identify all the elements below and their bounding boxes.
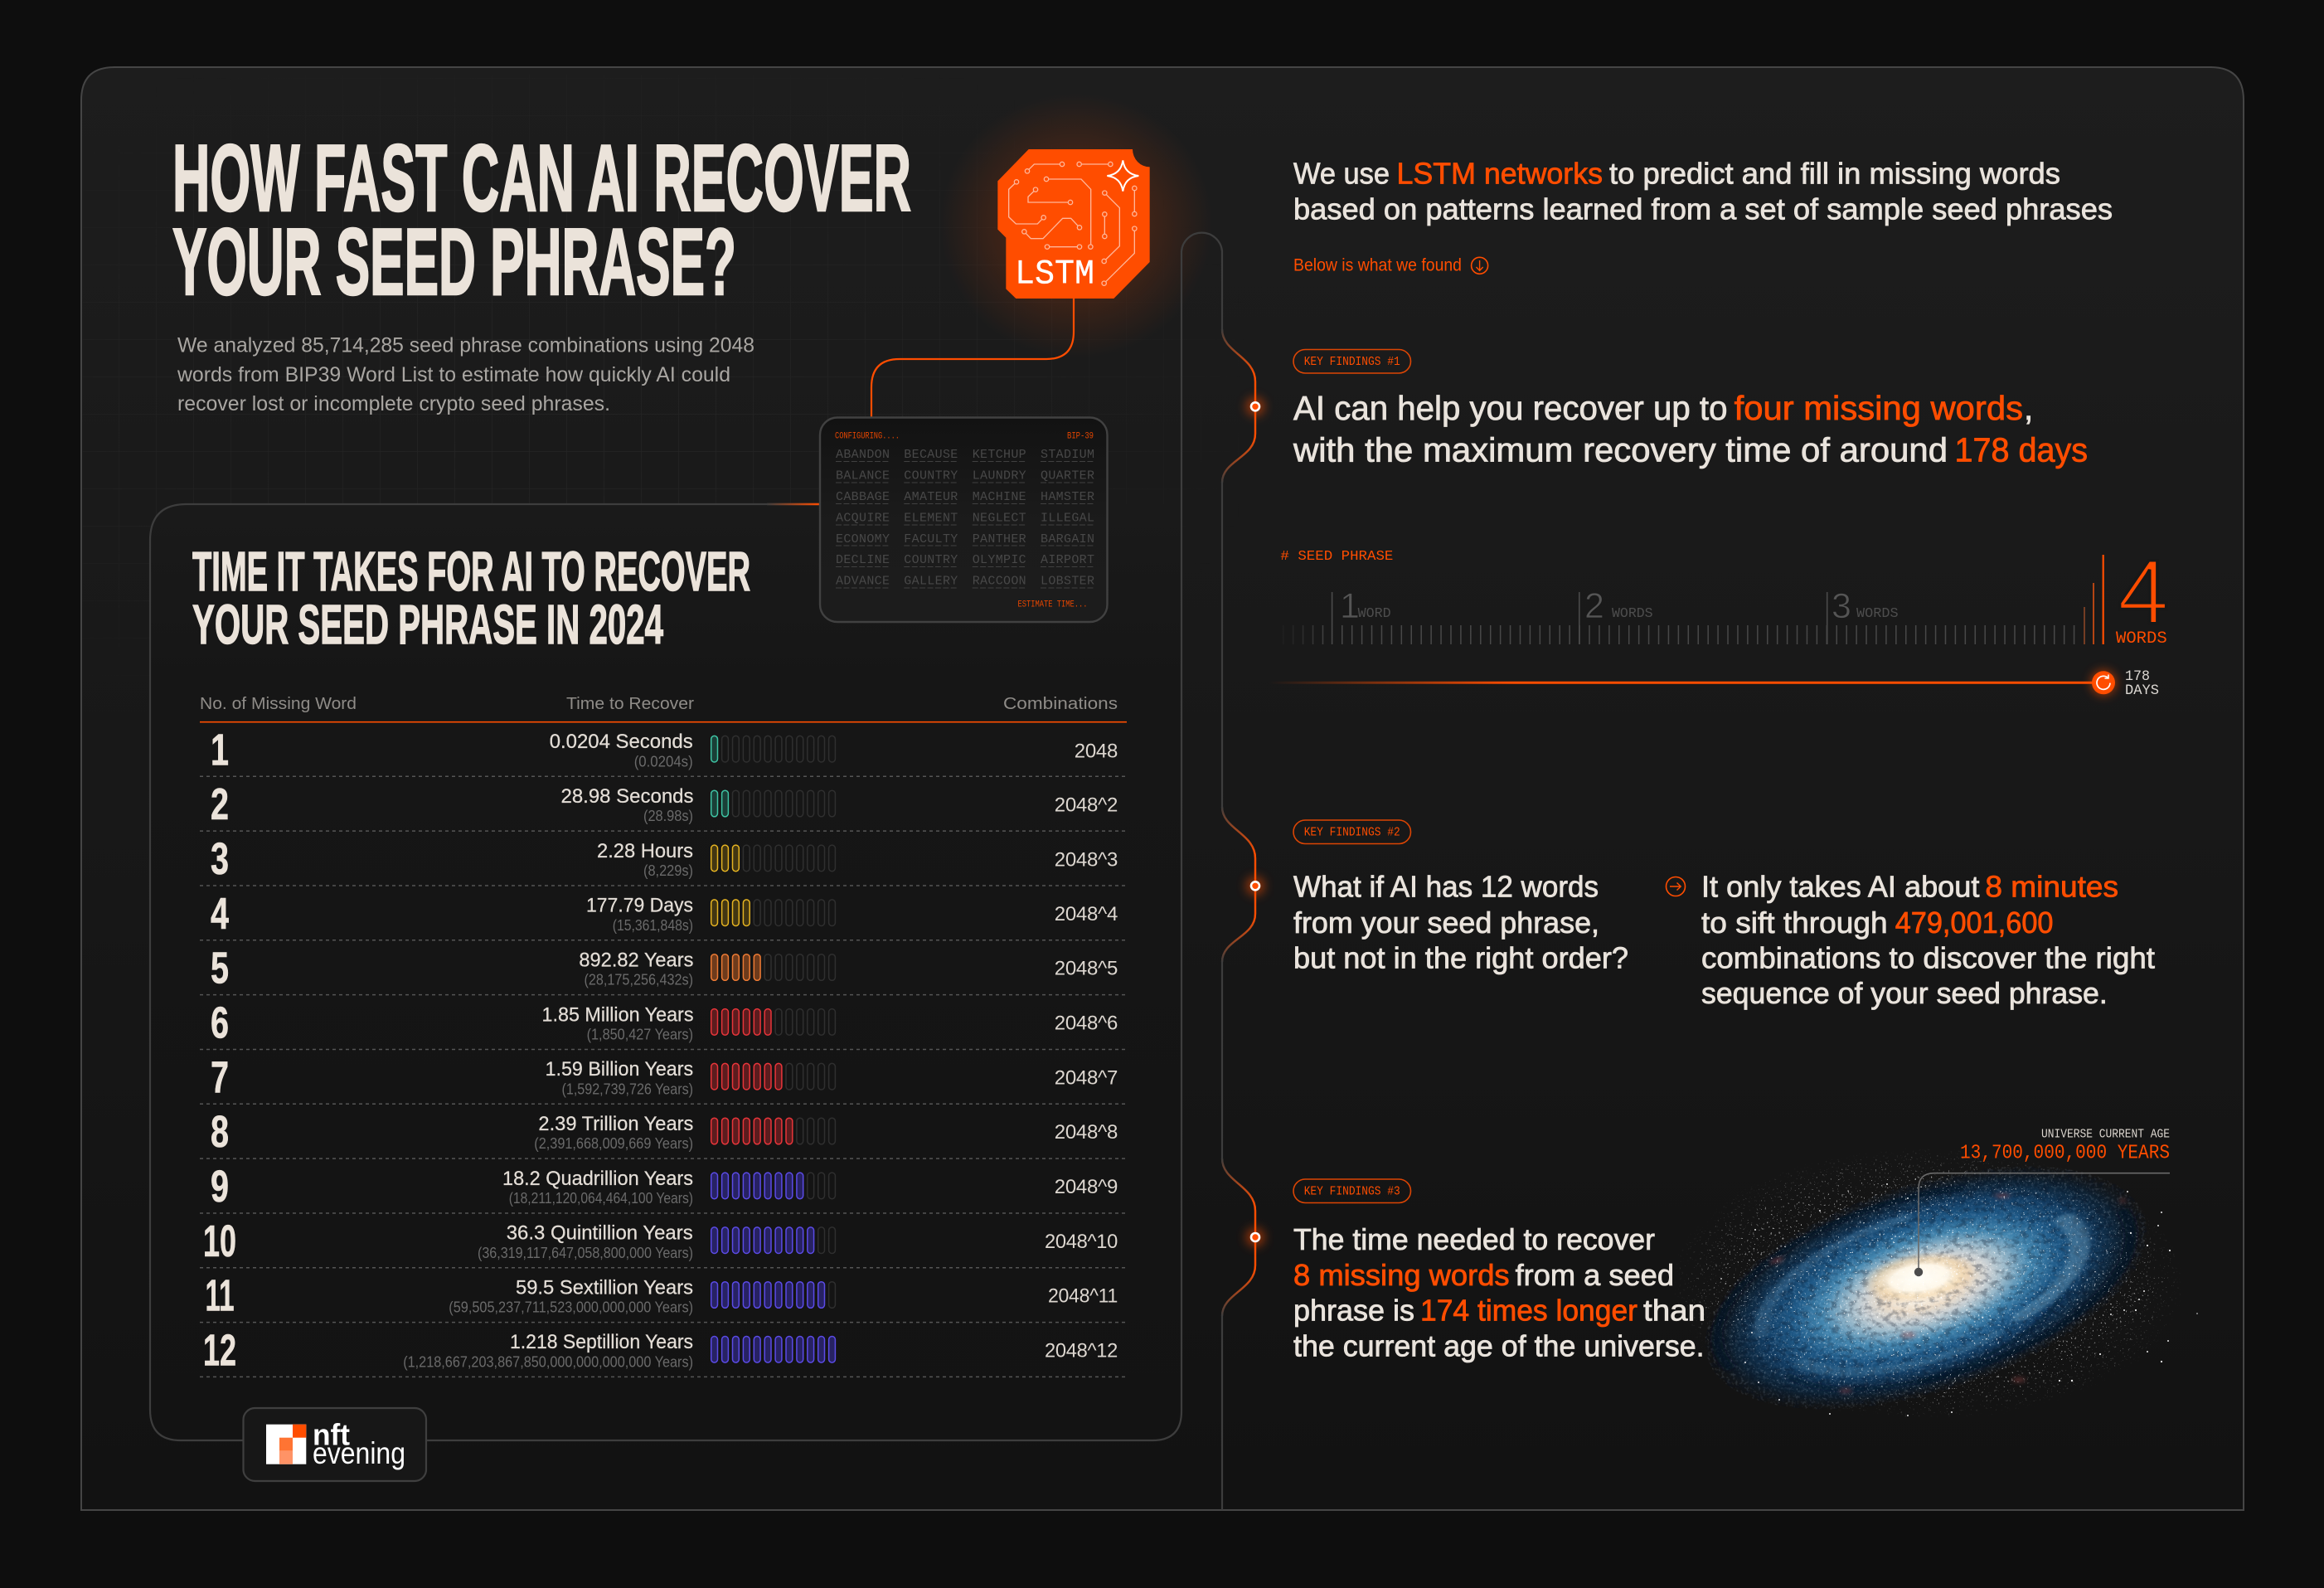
finding 2 answer: 8 minutes [1985, 869, 2118, 904]
title: HOW FAST CAN AI RECOVER [172, 126, 911, 231]
logo: nft evening [244, 1408, 426, 1481]
table row 12: (1,218,667,203,867,850,000,000,000,000 Years) [403, 1353, 693, 1370]
panel: BIP-39 terminal [820, 418, 1108, 622]
word list: NEGLECT [973, 511, 1026, 526]
ruler label: # SEED PHRASE [1280, 549, 1393, 565]
word list: BALANCE [836, 469, 890, 483]
table row 1: (0.0204s) [634, 753, 693, 770]
word list: HAMSTER [1041, 490, 1094, 504]
finding 3 text: from a seed [1516, 1258, 1674, 1292]
word list: MACHINE [973, 490, 1026, 504]
recovery time line [1269, 682, 2094, 684]
badge: key findings 2 [1293, 820, 1411, 844]
finding 3 text: 8 missing words [1293, 1258, 1510, 1292]
ruler tick labels [1340, 586, 1899, 626]
connector highlight: finding 2 [1222, 807, 1264, 962]
finding 2 answer: combinations to discover the right [1701, 940, 2155, 975]
table row 2 [200, 779, 1127, 831]
table row 10: 36.3 Quintillion Years [507, 1222, 693, 1245]
178 days label: DAYS [2125, 682, 2159, 699]
table row 6: 6 [211, 998, 229, 1048]
table row 10: 10 [203, 1216, 236, 1266]
table row 9 [200, 1162, 1127, 1213]
table row 7: (1,592,739,726 Years) [562, 1081, 693, 1097]
table row 3: (8,229s) [643, 862, 693, 879]
table row 7: 2048^7 [1055, 1066, 1118, 1089]
table row 2: 28.98 Seconds [560, 785, 693, 808]
finding 2 question: from your seed phrase, [1293, 906, 1599, 940]
finding 1 text [1293, 389, 2088, 469]
finding 1 text: 178 days [1955, 431, 2088, 469]
title: YOUR SEED PHRASE? [172, 210, 736, 315]
finding 1 text: with the maximum recovery time of around [1293, 431, 1948, 469]
finding 3 text: the current age of the universe. [1293, 1328, 1705, 1363]
finding 2 question: but not in the right order? [1293, 940, 1628, 975]
table row 10: 2048^10 [1045, 1231, 1118, 1253]
table row 8 [200, 1107, 1127, 1158]
below is what we found: Below is what we found [1293, 256, 1462, 275]
finding 2 answer [1701, 869, 2155, 1010]
table row 11: (59,505,237,711,523,000,000,000 Years) [449, 1299, 693, 1316]
badge: key findings 2: KEY FINDINGS #2 [1304, 826, 1400, 839]
icon: LSTM chip [997, 149, 1150, 299]
word list: PANTHER [973, 532, 1026, 546]
table row 11: 2048^11 [1048, 1285, 1118, 1308]
galaxy nebula patches [1769, 1194, 2126, 1393]
icon: timer dot [2091, 670, 2116, 695]
word list: ELEMENT [904, 511, 958, 526]
intro paragraph: words from BIP39 Word List to estimate how quickly AI could [177, 363, 730, 386]
seed phrase ruler [1269, 541, 2169, 699]
logo wordmark: nft [313, 1418, 350, 1452]
logo wordmark: evening [313, 1436, 405, 1470]
table header [200, 694, 1127, 722]
word list: ILLEGAL [1041, 511, 1094, 526]
callout: universe current age: UNIVERSE CURRENT AGE [2041, 1128, 2170, 1142]
finding 1 text: AI can help you recover up to [1293, 389, 1728, 427]
icon: LSTM chip: LSTM [1015, 256, 1094, 294]
178 days label [2125, 668, 2159, 699]
finding 2 question [1293, 869, 1628, 975]
finding 2 answer: to sift through [1701, 906, 1888, 940]
terminal status text: ESTIMATE TIME... [1018, 600, 1088, 610]
table row 3 [200, 834, 1127, 886]
connector highlight: finding 1 [1222, 329, 1264, 483]
table row 9: 18.2 Quadrillion Years [502, 1168, 693, 1190]
panel: table panel with connector outline [150, 233, 1255, 1510]
178 days label: 178 [2125, 668, 2150, 685]
word list: OLYMPIC [973, 553, 1026, 567]
word list: KETCHUP [973, 448, 1026, 462]
finding 2 answer: 479,001,600 [1895, 906, 2053, 940]
word list [836, 448, 1094, 589]
table row 6: 1.85 Million Years [542, 1003, 693, 1026]
callout: universe current age [1914, 1128, 2170, 1276]
finding 3 text: than [1643, 1294, 1705, 1327]
ruler tick labels: WORDS [1856, 605, 1899, 621]
table row 8: (2,391,668,009,669 Years) [534, 1135, 693, 1152]
intro statement: to predict and fill in missing words [1609, 157, 2060, 191]
table heading: YOUR SEED PHRASE IN 2024 [192, 594, 663, 656]
badge: key findings 1 [1293, 350, 1411, 373]
table row 1: 0.0204 Seconds [550, 731, 693, 753]
terminal status text: CONFIGURING.... [835, 431, 900, 441]
table row 8: 2048^8 [1055, 1121, 1118, 1144]
table row 3: 2.28 Hours [597, 840, 693, 862]
finding 3 text: The time needed to recover [1293, 1222, 1655, 1256]
intro paragraph: We analyzed 85,714,285 seed phrase combinations using 2048 [177, 333, 754, 357]
table row 12 [200, 1325, 1127, 1377]
table row 9: (18,211,120,064,464,100 Years) [509, 1190, 693, 1207]
word list: BECAUSE [904, 448, 958, 462]
word list: BARGAIN [1041, 532, 1094, 546]
finding 1 text: , [2024, 389, 2033, 427]
table row 2: (28.98s) [643, 808, 693, 824]
intro paragraph [177, 333, 754, 415]
table row 4: (15,361,848s) [613, 917, 693, 934]
word list: QUARTER [1041, 469, 1094, 483]
icon: arrow right [1667, 877, 1685, 896]
table row 4: 4 [211, 889, 229, 939]
table row 4: 177.79 Days [586, 895, 693, 917]
finding 3 text: phrase is [1293, 1294, 1414, 1327]
word list: ADVANCE [836, 574, 890, 589]
table row 10: (36,319,117,647,058,800,000 Years) [478, 1245, 693, 1261]
word list: FACULTY [904, 532, 958, 546]
badge: key findings 1: KEY FINDINGS #1 [1304, 356, 1400, 369]
terminal status text [835, 431, 1094, 610]
word list: LOBSTER [1041, 574, 1094, 589]
word list: LAUNDRY [973, 469, 1026, 483]
word list: RACCOON [973, 574, 1026, 589]
word list: STADIUM [1041, 448, 1094, 462]
ruler tick labels: 1 [1340, 586, 1360, 626]
table header: Time to Recover [566, 694, 694, 713]
table row 11: 59.5 Sextillion Years [516, 1276, 693, 1299]
table heading: TIME IT TAKES FOR AI TO RECOVER [192, 541, 750, 603]
table row 5: (28,175,256,432s) [584, 972, 693, 988]
word list: DECLINE [836, 553, 890, 567]
word list: AMATEUR [904, 490, 958, 504]
table row 8: 2.39 Trillion Years [538, 1113, 693, 1135]
ruler tick labels: 2 [1584, 586, 1604, 626]
table row 7: 1.59 Billion Years [546, 1058, 693, 1081]
intro statement: LSTM networks [1396, 157, 1603, 191]
table row 7: 7 [211, 1052, 229, 1102]
table row 12: 12 [203, 1325, 236, 1375]
table row 5 [200, 944, 1127, 995]
table heading [192, 541, 750, 656]
table row 7 [200, 1052, 1127, 1104]
finding 2 question: What if AI has 12 words [1293, 869, 1599, 904]
table row 1: 2048 [1075, 740, 1118, 762]
table row 5: 2048^5 [1055, 958, 1118, 980]
word list: ECONOMY [836, 532, 890, 546]
terminal status text: BIP-39 [1067, 431, 1094, 441]
table row 10 [200, 1216, 1127, 1268]
badge: key findings 3: KEY FINDINGS #3 [1304, 1186, 1400, 1199]
chip glow [939, 93, 1213, 358]
intro statement: We use [1293, 157, 1390, 191]
table row 9: 9 [211, 1162, 229, 1212]
table row 3: 3 [211, 834, 229, 884]
table row 5: 5 [211, 944, 229, 993]
word list: CABBAGE [836, 490, 890, 504]
table row 12: 1.218 Septillion Years [510, 1331, 693, 1353]
word list: GALLERY [904, 574, 958, 589]
word list: ABANDON [836, 448, 890, 462]
ruler highlighted four words: 4 [2118, 541, 2169, 643]
word list: COUNTRY [904, 469, 958, 483]
table row 6 [200, 998, 1127, 1050]
table row 11 [200, 1271, 1127, 1323]
ruler highlighted four words: WORDS [2116, 629, 2167, 648]
table row 4: 2048^4 [1055, 903, 1118, 925]
connector: chip to terminal [871, 299, 1074, 417]
finding 1 text: four missing words [1735, 389, 2023, 427]
table row 11: 11 [206, 1271, 234, 1321]
table row 5: 892.82 Years [579, 949, 693, 971]
table row 6: 2048^6 [1055, 1012, 1118, 1035]
badge: key findings 3 [1293, 1179, 1411, 1202]
table row 8: 8 [211, 1107, 229, 1157]
intro statement [1293, 157, 2113, 226]
word list: AIRPORT [1041, 553, 1094, 567]
ruler tick labels: 3 [1832, 586, 1851, 626]
table row 6: (1,850,427 Years) [587, 1027, 693, 1043]
connector highlight: finding 3 [1222, 1158, 1264, 1316]
finding 3 text [1293, 1222, 1705, 1363]
finding 2 answer: It only takes AI about [1701, 869, 1979, 904]
finding 3 text: 174 times longer [1420, 1294, 1637, 1327]
table row 12: 2048^12 [1045, 1339, 1118, 1362]
table row 9: 2048^9 [1055, 1176, 1118, 1198]
title [172, 126, 911, 315]
galaxy illustration [1675, 1149, 2198, 1417]
table header: Combinations [1003, 694, 1118, 713]
callout: universe current age: 13,700,000,000 YEARS [1960, 1143, 2170, 1165]
galaxy outlying stars [1720, 1183, 2198, 1416]
word list: COUNTRY [904, 553, 958, 567]
intro statement: based on patterns learned from a set of sample seed phrases [1293, 192, 2113, 226]
finding 2 answer: sequence of your seed phrase. [1701, 976, 2108, 1010]
table row 2: 2048^2 [1055, 794, 1118, 817]
table row 3: 2048^3 [1055, 849, 1118, 871]
ruler tick labels: WORD [1358, 605, 1391, 621]
table header: No. of Missing Word [200, 694, 357, 713]
word list: ACQUIRE [836, 511, 890, 526]
table row 1 [200, 725, 1127, 776]
intro paragraph: recover lost or incomplete crypto seed phrases. [177, 392, 610, 415]
ruler tick labels: WORDS [1612, 605, 1653, 621]
table row 4 [200, 889, 1127, 940]
logo wordmark [313, 1418, 405, 1470]
logo mark [266, 1425, 306, 1464]
table row 1: 1 [211, 725, 229, 775]
table row 2: 2 [211, 779, 229, 829]
